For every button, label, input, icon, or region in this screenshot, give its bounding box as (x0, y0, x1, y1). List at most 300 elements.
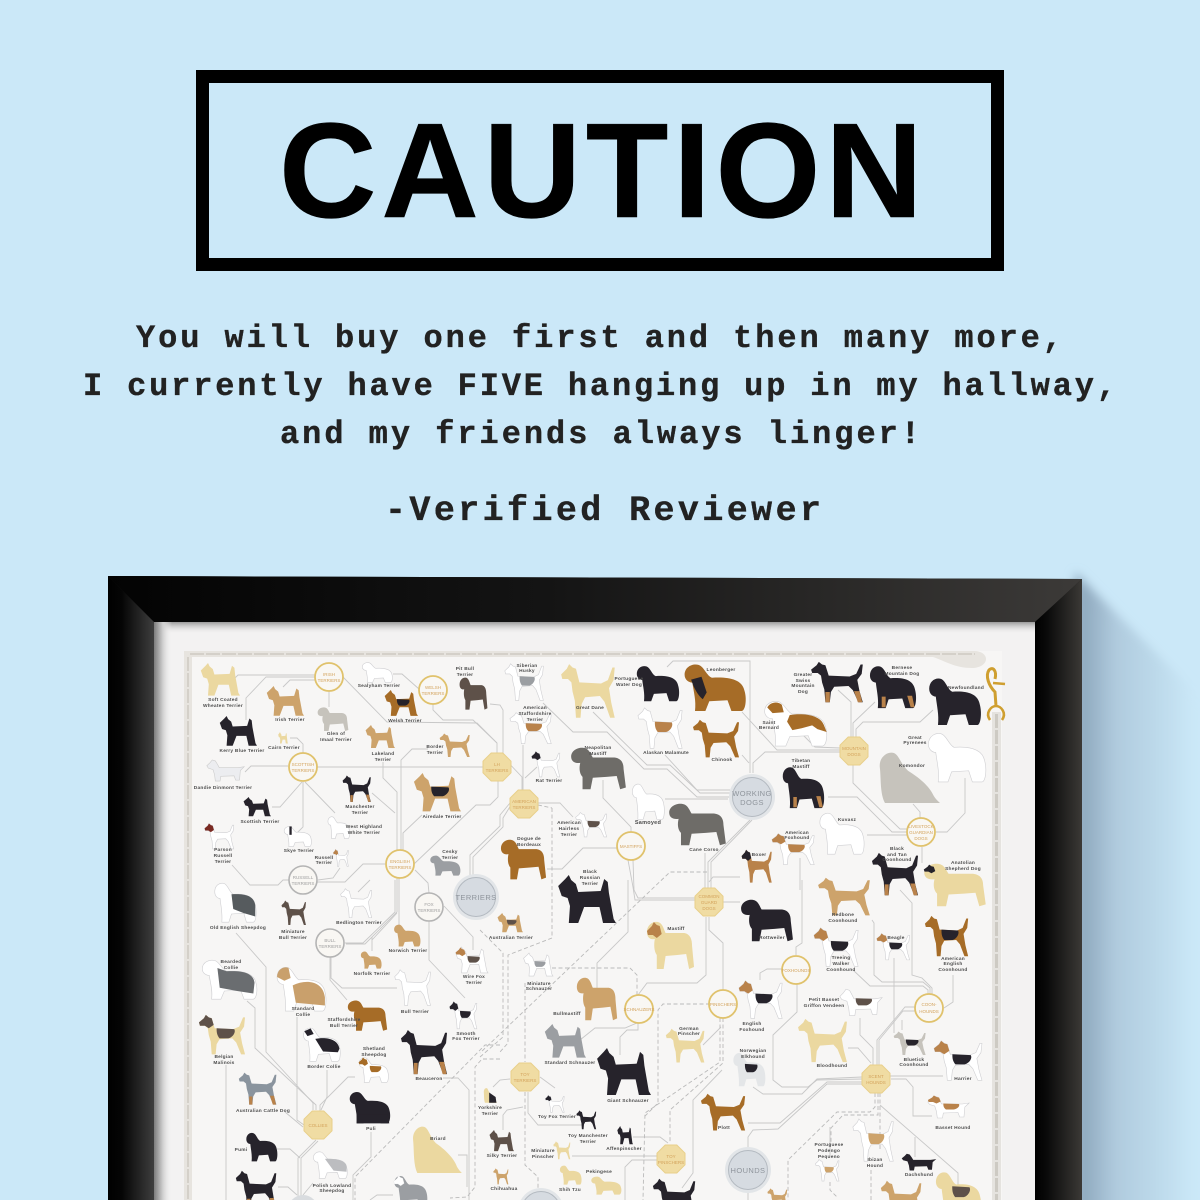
dog: puli (350, 1092, 390, 1132)
tag: mountain dogs: DOGS (847, 752, 861, 757)
dog: bearded collie (202, 959, 257, 999)
dog: rat terrier: Rat Terrier (536, 778, 562, 784)
tag: toy pinschers (657, 1145, 685, 1173)
dog: petit basset griffon vendeen: Petit Basset (809, 997, 839, 1003)
badge: coonhounds: HOUNDS (919, 1009, 939, 1014)
dog: american hairless terrier: Hairless (559, 826, 579, 832)
dog: belgian malinois (199, 1015, 245, 1066)
dog: manchester terrier: Manchester (345, 804, 375, 810)
dog: kerry blue terrier: Kerry Blue Terrier (220, 748, 264, 754)
dog: polish lowland sheepdog: Polish Lowland (313, 1183, 351, 1189)
dog: standard collie (277, 967, 326, 1018)
badge: bull terriers: BULL (324, 938, 336, 943)
dog: standard schnauzer: Standard Schnauzer (545, 1060, 595, 1066)
dog: russell terrier: Russell (315, 855, 333, 861)
dog: welsh terrier (385, 690, 422, 724)
dog: pit bull terrier (456, 666, 487, 710)
dog: petit basset griffon vendeen: Griffon Vendeen (804, 1003, 844, 1009)
medallion: working dogs: DOGS (740, 798, 764, 807)
dog: wire fox terrier: Wire Fox (463, 974, 485, 980)
dog: ibizan hound: Hound (867, 1163, 883, 1169)
dog: black russian terrier (558, 869, 616, 923)
dog: entlebucher (236, 1171, 276, 1200)
tag: collies (304, 1111, 332, 1139)
dog: otterhound (936, 1172, 981, 1200)
dog: american staffordshire terrier (510, 705, 552, 744)
badge: bull terriers: TERRIERS (319, 944, 341, 949)
dog: wire fox terrier (456, 947, 488, 986)
dog: english foxhound: Foxhound (739, 1027, 765, 1033)
dog: bluetick coonhound: Bluetick (904, 1057, 924, 1063)
dog: skye terrier (284, 826, 314, 854)
review quote: and my friends always linger! (280, 416, 920, 453)
dog: dandie dinmont terrier: Dandie Dinmont Terrier (194, 785, 252, 791)
dog: scottish terrier (240, 797, 280, 825)
dog: smooth fox terrier (450, 1002, 480, 1042)
dog: redbone coonhound: Redbone (832, 912, 854, 918)
leash border (184, 651, 1001, 1200)
badge: scottish terriers: TERRIERS (292, 768, 314, 773)
dog: bernese mountain dog: Bernese (892, 665, 912, 671)
dog: anatolian shepherd dog (924, 860, 986, 906)
badge: irish terriers: IRISH (323, 672, 335, 677)
dog: standard collie: Collie (296, 1012, 310, 1018)
dog: lakeland terrier: Terrier (375, 757, 391, 763)
dog: american foxhound (772, 830, 814, 865)
dog: neapolitan mastiff (571, 745, 626, 789)
dog: leonberger (685, 664, 746, 711)
dog: portuguese podengo pequeno: Pequeno (818, 1154, 840, 1160)
dog: smooth fox terrier: Smooth (456, 1031, 476, 1037)
dog: briard: Briard (430, 1136, 446, 1142)
dog: german pinscher: Pinscher (678, 1031, 700, 1037)
dog: siberian husky (505, 663, 543, 700)
dog: bearded collie: Collie (224, 965, 238, 971)
badge: bull terriers (316, 929, 344, 957)
dog: black and tan coonhound: Black (890, 846, 904, 852)
dog: samoyed: Samoyed (635, 820, 661, 826)
dog: norwich terrier: Norwich Terrier (389, 948, 427, 954)
dog: bluetick coonhound: Coonhound (899, 1062, 929, 1068)
frame shadow (1075, 572, 1200, 1200)
dog: belgian malinois: Belgian (214, 1054, 234, 1060)
dog: manchester terrier (343, 776, 375, 816)
dog: beauceron: Beauceron (415, 1076, 443, 1082)
dog: boxer: Boxer (752, 852, 766, 858)
poster sheet (184, 651, 1002, 1200)
dog: airedale terrier (414, 773, 462, 820)
dog: standard schnauzer (545, 1024, 595, 1066)
dog: german pinscher: German (679, 1026, 699, 1032)
dog: toy manchester terrier: Terrier (580, 1139, 596, 1145)
badge: pinschers (709, 990, 737, 1018)
badge: livestock guardian dogs: LIVESTOCK (908, 824, 934, 829)
dog: cesky terrier (430, 849, 460, 876)
badge: coonhounds: COON- (922, 1002, 937, 1007)
dog: miniature pinscher: Pinscher (532, 1154, 554, 1160)
dog: norwich terrier (389, 925, 427, 954)
dog: cairn terrier (268, 732, 300, 751)
medallion: toy dogs, cut off at edge (518, 1188, 564, 1200)
dog: yorkshire terrier: Yorkshire (478, 1105, 502, 1111)
dog: toy manchester terrier (568, 1110, 608, 1145)
caution box (202, 76, 998, 264)
dog: affenpinscher (606, 1126, 642, 1152)
dog: glen of imaal terrier (318, 707, 352, 743)
dog: anatolian shepherd dog: Anatolian (951, 860, 975, 866)
dog: parson russell terrier: Russell (214, 853, 232, 859)
dog: chihuahua: Chihuahua (490, 1186, 518, 1192)
tag: common guard dogs: DOGS (702, 906, 716, 911)
badge: russell terriers (289, 866, 317, 894)
dog: polish lowland sheepdog (313, 1152, 351, 1194)
dog: american staffordshire terrier: American (523, 705, 547, 711)
dog: irish terrier (267, 686, 305, 723)
dog: russell terrier (315, 849, 348, 866)
dog: standard collie: Standard (292, 1006, 314, 1012)
badge: foxhounds (782, 956, 810, 984)
dog: old english sheepdog: Old English Sheepdog (210, 925, 266, 931)
dog: glen of imaal terrier: Imaal Terrier (320, 737, 352, 743)
tag: mountain dogs (840, 737, 868, 765)
dog: silky terrier (487, 1130, 517, 1159)
dog: alaskan malamute (638, 708, 689, 756)
review quote (83, 320, 1116, 531)
dog: silky terrier: Silky Terrier (487, 1153, 517, 1159)
dog: redbone coonhound (818, 878, 870, 924)
dog: wire fox terrier: Terrier (466, 980, 482, 986)
dog: bloodhound: Bloodhound (817, 1063, 847, 1069)
tag: scent hounds: HOUNDS (866, 1080, 886, 1085)
dog: lakeland terrier (366, 725, 395, 763)
dog: great dane: Great Dane (576, 705, 604, 711)
dog: tibetan mastiff (783, 758, 824, 808)
dog: parson russell terrier: Parson (214, 847, 232, 853)
tag: lh terriers (483, 753, 511, 781)
badge: fox terriers: TERRIERS (418, 908, 440, 913)
dog: doberman (653, 1179, 695, 1200)
dog: mastiff (647, 922, 694, 969)
dog: pit bull terrier: Terrier (457, 672, 473, 678)
dog: miniature bull terrier: Miniature (281, 929, 305, 935)
dog: black and tan coonhound: and Tan (887, 852, 907, 858)
tag: herding dogs, cut off at edge (288, 1195, 318, 1200)
dog: german pinscher (666, 1026, 704, 1063)
dog: dachshund (902, 1154, 936, 1178)
tag: common guard dogs (695, 888, 723, 916)
dog: great pyrenees: Great (908, 735, 922, 741)
dog: australian terrier (489, 913, 533, 941)
dog: portuguese podengo pequeno: Podengo (818, 1148, 840, 1154)
dog: smooth fox terrier: Fox Terrier (452, 1036, 480, 1042)
dog: soft coated wheaten terrier: Wheaten Terrier (203, 703, 243, 709)
dog: newfoundland: Newfoundland (948, 685, 984, 691)
dog: beagle (877, 934, 910, 960)
dog: norwegian elkhound (733, 1048, 766, 1086)
picture frame (108, 576, 1082, 1200)
dog: great dane (561, 664, 615, 718)
dog: american hairless terrier (557, 813, 607, 838)
dog: greater swiss mountain dog (791, 662, 863, 702)
dog: black and tan coonhound (872, 846, 918, 895)
medallion: hounds: HOUNDS (731, 1166, 765, 1175)
badge: welsh terriers: TERRIERS (422, 691, 444, 696)
dog: sealyham terrier: Sealyham Terrier (358, 683, 400, 689)
dog: great pyrenees (903, 734, 986, 782)
dog: portuguese podengo pequeno (815, 1142, 844, 1181)
dog: bullmastiff (553, 978, 617, 1020)
dog: kuvasz (820, 813, 864, 854)
dog: bearded collie: Bearded (221, 959, 241, 965)
dog: pekingese: Pekingese (586, 1169, 612, 1175)
dog: glen of imaal terrier: Glen of (327, 731, 345, 737)
badge: english terriers (386, 850, 414, 878)
tag: lh terriers: TERRIERS (486, 768, 508, 773)
dog: greater swiss mountain dog: Greater (794, 672, 812, 678)
dog: briard (413, 1127, 462, 1173)
badge: coonhounds (915, 994, 943, 1022)
dog: west highland white terrier: White Terrier (348, 830, 380, 836)
dog: american foxhound: American (785, 830, 809, 836)
dog: rat terrier (532, 752, 562, 784)
dog: portuguese water dog (615, 666, 679, 701)
dog: cane corso: Cane Corso (689, 847, 719, 853)
dog: american staffordshire terrier: Staffordshire (518, 711, 552, 717)
dog: beauceron (401, 1030, 447, 1082)
dog: american english coonhound: English (943, 961, 963, 967)
dog: greater swiss mountain dog: Mountain (791, 683, 815, 689)
dog: american english coonhound: Coonhound (938, 967, 968, 973)
dog: black russian terrier: Russian (580, 875, 600, 881)
dog: australian cattle dog (236, 1073, 290, 1114)
dog: black russian terrier: Terrier (582, 881, 598, 887)
badge: welsh terriers (419, 676, 447, 704)
badge: schnauzers (623, 995, 655, 1023)
dog: west highland white terrier: West Highland (346, 824, 382, 830)
dog: kerry blue terrier (220, 716, 264, 754)
dog: border terrier (426, 734, 470, 757)
dog: pekingese (586, 1169, 621, 1195)
dog: cane corso (669, 804, 726, 853)
tag: american terriers: AMERICAN (512, 799, 536, 804)
dog: west highland white terrier (328, 817, 382, 839)
tag: common guard dogs: COMMON (698, 894, 720, 899)
dog: bull terrier (395, 970, 430, 1015)
dog: chinook (693, 720, 739, 763)
badge: irish terriers (315, 663, 343, 691)
dog: basset hound: Basset Hound (935, 1125, 971, 1131)
dog: dogue de bordeaux: Dogue de (517, 836, 541, 842)
dog: giant schnauzer: Giant Schnauzer (607, 1098, 649, 1104)
dog: shih tzu: Shih Tzu (559, 1187, 581, 1193)
dog: cairn terrier: Cairn Terrier (268, 745, 300, 751)
dog: kuvasz: Kuvasz (838, 817, 856, 823)
dog: shetland sheepdog (359, 1046, 388, 1082)
dog: giant schnauzer (597, 1048, 651, 1104)
dog: mastiff: Mastiff (667, 926, 685, 932)
dog: siberian husky: Husky (519, 668, 535, 674)
dog: ibizan hound: Ibizan (867, 1157, 883, 1163)
dog: russell terrier: Terrier (316, 860, 332, 866)
badge: irish terriers: TERRIERS (318, 678, 340, 683)
dog: hound head at bottom edge (767, 1188, 787, 1200)
dog: soft coated wheaten terrier: Soft Coated (208, 697, 238, 703)
badge: fox terriers (415, 893, 443, 921)
dog: treeing walker coonhound: Coonhound (826, 967, 856, 973)
dog: rottweiler: Rottweiler (759, 935, 785, 941)
dog: leonberger: Leonberger (707, 667, 735, 673)
badge: russell terriers: RUSSELL (293, 875, 314, 880)
dog: affenpinscher: Affenpinscher (606, 1146, 642, 1152)
dog: manchester terrier: Terrier (352, 810, 368, 816)
dog: tibetan mastiff: Tibetan (792, 758, 810, 764)
medallion: working dogs (729, 774, 775, 820)
dog: toy fox terrier: Toy Fox Terrier (538, 1114, 576, 1120)
badge: russell terriers: TERRIERS (292, 881, 314, 886)
mat (154, 622, 1035, 1200)
dog: skye terrier: Skye Terrier (284, 848, 314, 854)
medallion: hounds (725, 1147, 771, 1193)
dog: american english coonhound (925, 916, 968, 973)
tag: american terriers (510, 790, 538, 818)
dog: dachshund: Dachshund (905, 1172, 933, 1178)
dog: norwegian elkhound: Elkhound (741, 1054, 765, 1060)
badges: large group medallions (288, 774, 775, 1200)
dog: old english sheepdog (210, 883, 266, 931)
dog: black russian terrier: Black (583, 869, 597, 875)
tag: scent hounds: SCENT (868, 1074, 884, 1079)
dog: miniature bull terrier: Bull Terrier (279, 935, 307, 941)
dog: chinook: Chinook (712, 757, 733, 763)
dog: plott (701, 1094, 745, 1131)
badge: mastiffs (617, 832, 645, 860)
tag: scent hounds (862, 1065, 890, 1093)
dog: newfoundland (929, 678, 984, 725)
dog: harrier (934, 1041, 982, 1082)
medallion: working dogs: WORKING (732, 789, 772, 798)
tag: collies: COLLIES (308, 1123, 328, 1128)
dog: portuguese water dog: Water Dog (616, 682, 642, 688)
dog: miniature pinscher (531, 1141, 570, 1160)
tag: mountain dogs: MOUNTAIN (842, 746, 866, 751)
dog: parson russell terrier: Terrier (215, 859, 231, 865)
tag: toy pinschers: PINSCHERS (658, 1160, 684, 1165)
tag: american terriers: TERRIERS (513, 805, 535, 810)
dog: norwegian elkhound: Norwegian (740, 1048, 766, 1054)
badges: gold octagon tags (304, 737, 890, 1173)
dog: lakeland terrier: Lakeland (372, 751, 394, 757)
dog: bluetick coonhound (894, 1032, 929, 1068)
badge: foxhounds: FOXHOUNDS (782, 968, 810, 973)
dog: komondor (880, 753, 940, 803)
dog: beagle: Beagle (887, 935, 905, 941)
dog: alaskan malamute: Alaskan Malamute (643, 750, 689, 756)
dog: scottish terrier: Scottish Terrier (240, 819, 280, 825)
dog: bedlington terrier: Bedlington Terrier (336, 920, 382, 926)
dog: english foxhound: English (742, 1021, 762, 1027)
dog: redbone coonhound: Coonhound (828, 918, 858, 924)
tag: toy terriers (511, 1063, 539, 1091)
dog: black and tan coonhound: Coonhound (882, 857, 912, 863)
dog: portuguese water dog: Portuguese (615, 676, 644, 682)
dog: samoyed (632, 784, 664, 826)
dog: neapolitan mastiff: Mastiff (589, 751, 607, 757)
badge: scottish terriers (289, 753, 317, 781)
dog: shetland sheepdog: Shetland (363, 1046, 385, 1052)
dog: neapolitan mastiff: Neapolitan (584, 745, 612, 751)
dog: australian cattle dog: Australian Cattle Dog (236, 1108, 290, 1114)
dog: greater swiss mountain dog: Swiss (796, 678, 811, 684)
dog: pumi (235, 1133, 277, 1161)
dog: border terrier: Terrier (427, 750, 443, 756)
dog: australian terrier: Australian Terrier (489, 935, 533, 941)
reviewer attribution: -Verified Reviewer (385, 491, 821, 531)
dog: toy manchester terrier: Toy Manchester (568, 1133, 608, 1139)
dog: treeing walker coonhound: Walker (832, 961, 850, 967)
dog: bull terrier: Bull Terrier (401, 1009, 429, 1015)
icon: gold leash clip (987, 669, 1005, 720)
dog: miniature schnauzer: Schnauzer (526, 986, 552, 992)
dog: welsh terrier: Welsh Terrier (388, 718, 422, 724)
dog: tibetan mastiff: Mastiff (792, 764, 810, 770)
dog: basset hound (928, 1096, 971, 1131)
badge: scottish terriers: SCOTTISH (292, 762, 314, 767)
badges: gold ring groups (289, 663, 943, 1023)
dog: bedlington terrier (336, 889, 382, 926)
badge: welsh terriers: WELSH (425, 685, 441, 690)
dog: border collie: Border Collie (307, 1064, 341, 1070)
dog: dogue de bordeaux (501, 836, 546, 879)
dog: bloodhound (798, 1019, 847, 1069)
dog: cesky terrier: Cesky (442, 849, 458, 855)
dog: soft coated wheaten terrier (201, 663, 243, 709)
badge: mastiffs: MASTIFFS (620, 844, 642, 849)
medallion: terriers (453, 874, 499, 920)
dog: pumi: Pumi (235, 1147, 247, 1153)
dog: american hairless terrier: American (557, 820, 581, 826)
dog: border collie (304, 1028, 341, 1070)
dog: american hairless terrier: Terrier (561, 832, 577, 838)
dog: rottweiler (741, 900, 793, 941)
dog: yorkshire terrier (478, 1088, 502, 1117)
dog: greater swiss mountain dog: Dog (798, 689, 808, 695)
badge: fox terriers: FOX (424, 902, 434, 907)
dog: belgian malinois: Malinois (213, 1060, 235, 1066)
dog: toy fox terrier (538, 1095, 576, 1120)
dog: american staffordshire terrier: Terrier (527, 717, 543, 723)
dog: harrier: Harrier (954, 1076, 972, 1082)
dog: chihuahua (490, 1168, 518, 1192)
dog: american english coonhound: American (941, 956, 965, 962)
dog: boxer (742, 850, 772, 883)
dashed connector lines (355, 805, 880, 1200)
tag: toy terriers: TERRIERS (514, 1078, 536, 1083)
dog: sloughi (881, 1181, 921, 1200)
dog: dandie dinmont terrier (194, 760, 252, 791)
dog: shetland sheepdog: Sheepdog (361, 1052, 387, 1058)
dog: bernese mountain dog: Mountain Dog (885, 671, 919, 677)
dog: anatolian shepherd dog: Shepherd Dog (945, 866, 981, 872)
dog: australian shepherd (394, 1176, 427, 1200)
dog: petit basset griffon vendeen (804, 989, 882, 1016)
dog: komondor: Komondor (899, 763, 925, 769)
dog: bullmastiff: Bullmastiff (553, 1011, 581, 1017)
dog: norfolk terrier: Norfolk Terrier (354, 971, 390, 977)
dog: plott: Plott (718, 1125, 730, 1131)
dog: irish terrier: Irish Terrier (275, 717, 305, 723)
dog: saint bernard: Bernard (759, 725, 779, 731)
badge: livestock guardian dogs (907, 818, 935, 846)
